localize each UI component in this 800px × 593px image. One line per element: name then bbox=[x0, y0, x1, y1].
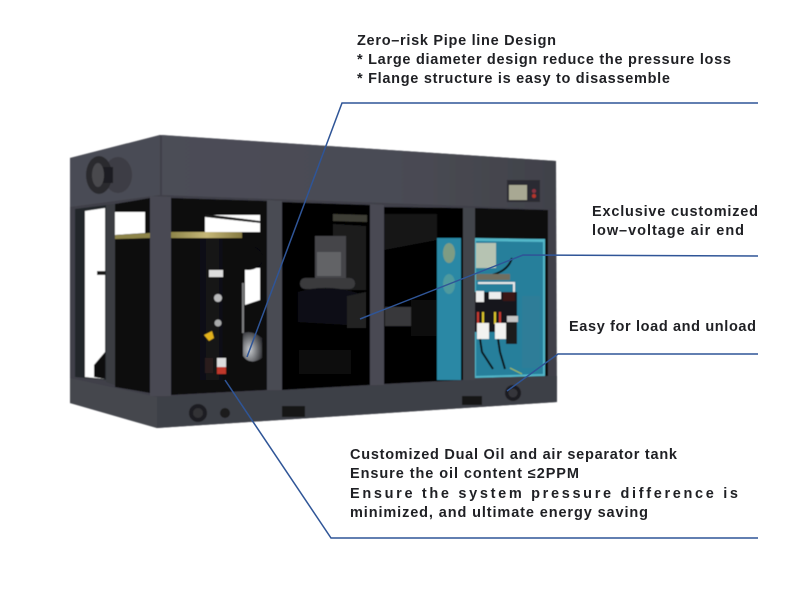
compressor machine bbox=[70, 135, 557, 428]
callout: load and unload: Easy for load and unload bbox=[569, 319, 756, 335]
callout: low-voltage air end: low–voltage air end bbox=[592, 223, 744, 239]
callout: zero-risk pipe line design: * Large diameter design reduce the pressure loss bbox=[357, 52, 731, 68]
callout: zero-risk pipe line design: Zero–risk Pipe line Design bbox=[357, 33, 556, 49]
air end bay bbox=[282, 202, 370, 390]
left side bay with glass opening bbox=[75, 198, 150, 393]
callout: separator tank: minimized, and ultimate energy saving bbox=[350, 505, 648, 521]
callout: separator tank: Ensure the system pressure difference is bbox=[350, 486, 738, 502]
cabinet body bbox=[70, 135, 557, 428]
callout: separator tank bbox=[350, 447, 738, 521]
base front face bbox=[157, 376, 557, 428]
tank label and gauges bbox=[209, 270, 223, 277]
flange on top left bbox=[86, 156, 132, 194]
callout: low-voltage air end bbox=[592, 204, 758, 239]
separator dome bbox=[233, 246, 263, 270]
base ports and vents bbox=[189, 385, 521, 422]
callout: zero-risk pipe line design bbox=[357, 33, 731, 87]
electrical components bbox=[478, 283, 514, 310]
control display panel bbox=[507, 180, 540, 202]
leader: pipe line bbox=[247, 103, 758, 357]
leader: separator tank bbox=[225, 380, 758, 538]
middle bay with cooling filter bbox=[384, 207, 463, 384]
electrical cabinet bay bbox=[475, 208, 548, 378]
callout: separator tank: Customized Dual Oil and air separator tank bbox=[350, 447, 678, 463]
top panel front face bbox=[162, 135, 556, 209]
base left face bbox=[70, 378, 157, 428]
front column 2 bbox=[267, 200, 282, 390]
front column 1 bbox=[150, 196, 171, 396]
gold tank lid bbox=[171, 232, 242, 238]
leader lines bbox=[225, 103, 758, 538]
front column 4 bbox=[463, 208, 475, 380]
air end unit bbox=[315, 236, 346, 280]
leader: load and unload bbox=[507, 354, 758, 391]
top panel left face bbox=[70, 135, 160, 207]
callout: low-voltage air end: Exclusive customized bbox=[592, 204, 758, 220]
oil and air separator tank bay bbox=[171, 198, 267, 395]
leader: air end bbox=[360, 255, 758, 319]
blue door panel bbox=[437, 238, 461, 380]
front column 3 bbox=[370, 204, 384, 385]
callout: zero-risk pipe line design: * Flange structure is easy to disassemble bbox=[357, 71, 670, 87]
separator tank body bbox=[171, 238, 242, 380]
elbow pipe bbox=[243, 332, 262, 362]
callout: separator tank: Ensure the oil content ≤2PPM bbox=[350, 466, 579, 482]
